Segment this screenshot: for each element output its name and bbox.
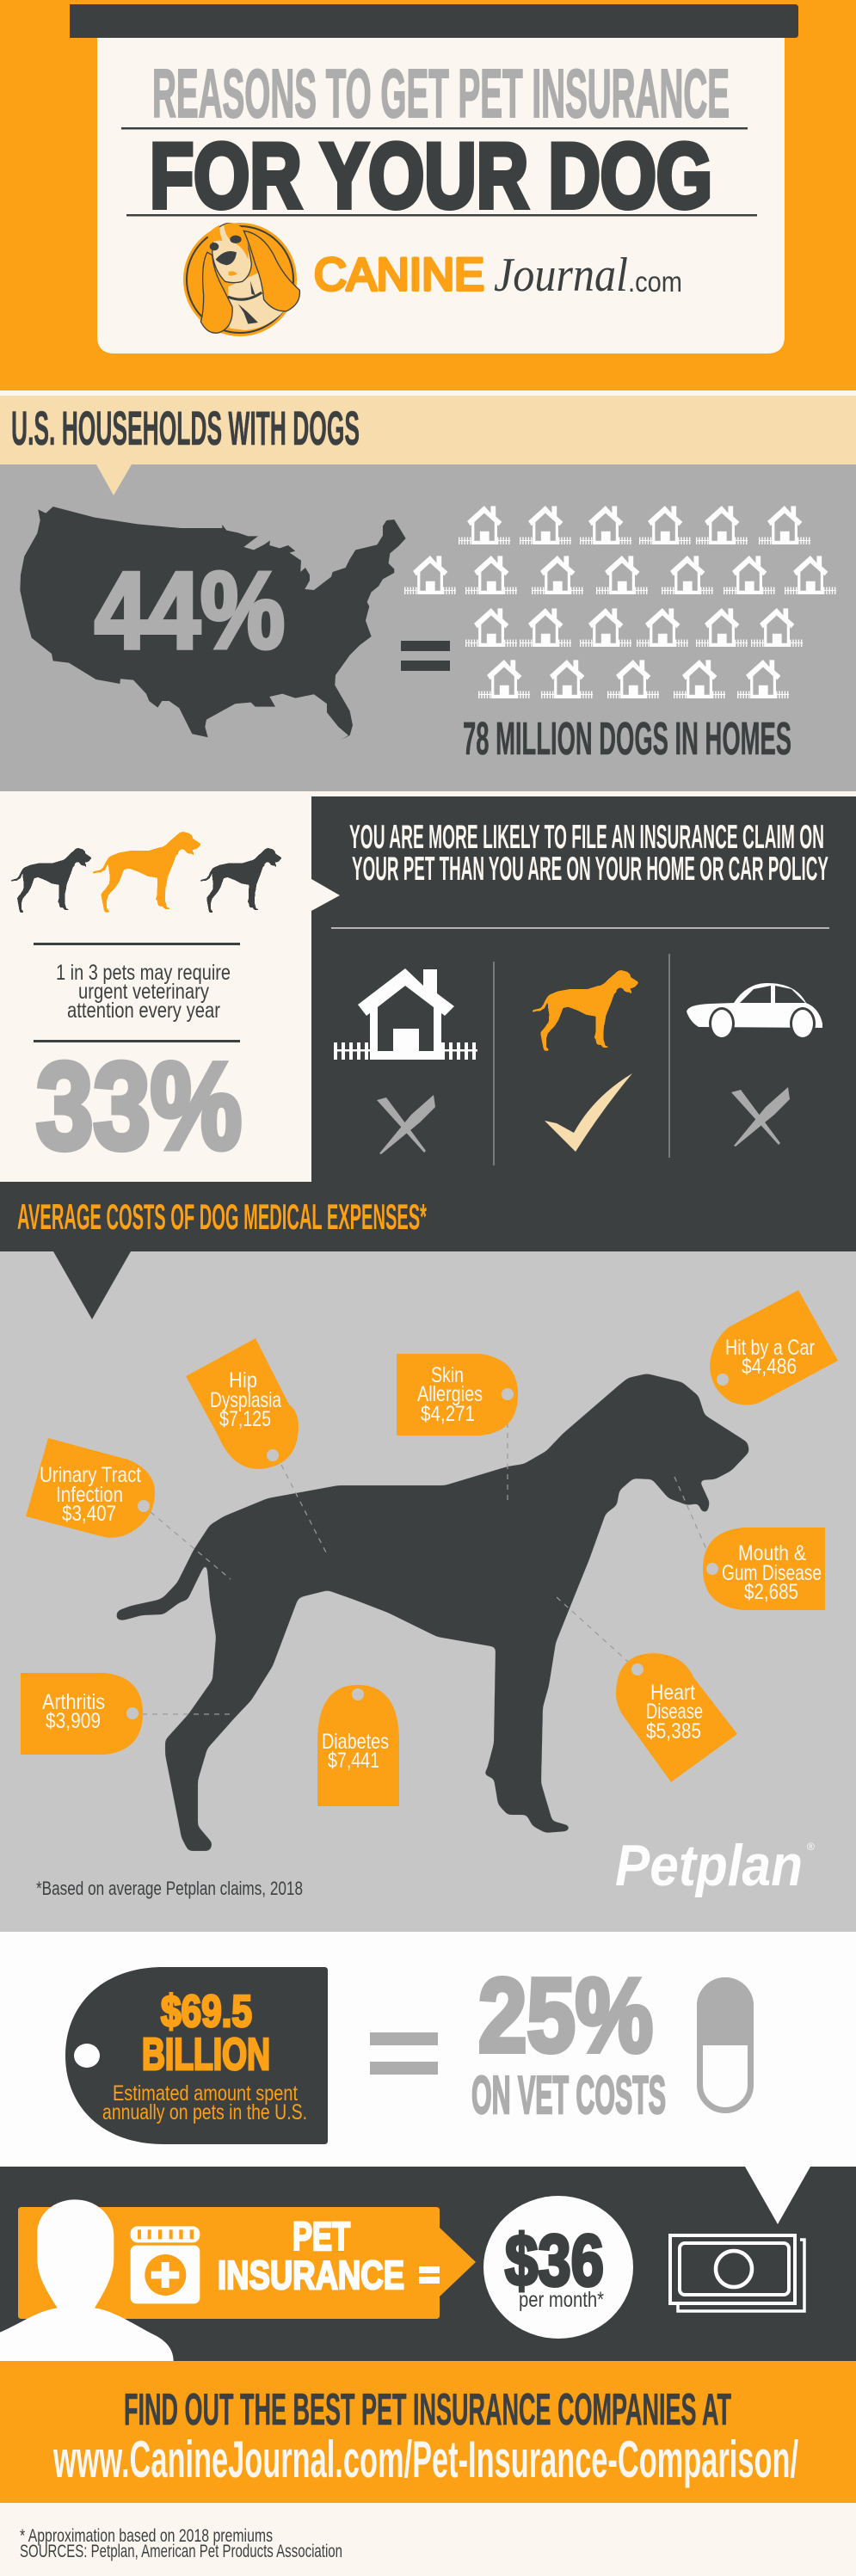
dark price tag: Estimated amount spent [113,2081,298,2106]
divider strip [0,390,856,396]
title line two: FOR YOUR DOG [150,124,712,227]
urgent care panel [0,796,340,1182]
registered mark: ® [807,1841,815,1853]
panel pointer [311,879,340,911]
medical costs panel [0,1251,856,1932]
icon: money stack [670,2235,804,2311]
tag: arthritis: Arthritis [42,1690,105,1714]
icon: check for pet [545,1073,632,1152]
us map [20,507,406,740]
dark price tag [65,1967,328,2144]
tag: hip dysplasia: Hip [229,1368,257,1393]
tag: skin allergies: $4,271 [421,1402,475,1426]
dark price tag: $69.5 [161,1987,252,2037]
tag: mouth and gum disease: $2,685 [744,1580,798,1604]
footnote: * Approximation based on 2018 premiums [20,2526,273,2546]
tag: urinary tract infection [26,1438,155,1538]
tag: hit by a car: $4,486 [742,1355,797,1379]
tag: mouth and gum disease [703,1528,825,1610]
dark price tag: annually on pets in the U.S. [102,2100,307,2124]
tag: arthritis [21,1673,143,1755]
tag: hit by a car: Hit by a Car [725,1336,815,1360]
tag: urinary tract infection: $3,407 [62,1502,116,1526]
header panel [0,0,856,390]
spending panel [0,1932,856,2167]
text: AVERAGE COSTS OF DOG MEDICAL EXPENSES* [17,1196,427,1237]
logo: dog in circle [183,223,299,336]
heading pointer [53,1251,131,1319]
tag: mouth and gum disease: Gum Disease [722,1561,822,1585]
petplan logo: Petplan [615,1833,803,1898]
equals sign [370,2032,438,2075]
dark band under panel [0,1182,311,1251]
dog icons [11,832,281,913]
icon: orange dog [533,970,638,1051]
tag: hit by a car [710,1290,838,1405]
sources: SOURCES: Petplan, American Pet Products Association [20,2542,342,2561]
tag: heart disease: Disease [646,1700,703,1724]
price circle: $36 [505,2220,604,2301]
households panel [0,396,856,791]
44 percent: 44% [95,550,285,671]
claims panel: dark side [311,796,856,1251]
pet insurance label: PET [293,2214,350,2259]
tag: arthritis: $3,909 [46,1709,101,1733]
icon: car [687,983,822,1040]
households panel: U.S. HOUSEHOLDS WITH DOGS [11,401,360,455]
tag: hip dysplasia: Dysplasia [210,1388,281,1412]
tag: hip dysplasia: $7,125 [219,1407,271,1431]
tag: hip dysplasia [186,1338,299,1469]
rule one [121,127,748,129]
urgent care text line three: attention every year [67,999,220,1023]
tag: skin allergies: Allergies [417,1382,483,1406]
households heading band [0,396,856,464]
source note: *Based on average Petplan claims, 2018 [36,1878,303,1899]
tag: heart disease: Heart [650,1681,695,1705]
dark price tag: BILLION [142,2030,270,2080]
pet insurance label line two: INSURANCE [218,2253,404,2297]
price circle: per month* [519,2288,604,2312]
orange arrow banner [18,2207,476,2319]
tag: skin allergies [397,1354,518,1436]
logo wordmark: dot com: .com [628,266,682,298]
divider strip [0,791,856,796]
tag: diabetes: $7,441 [328,1749,379,1773]
rule two [126,214,757,217]
equals sign [419,2266,440,2284]
icon: cross for home [377,1095,435,1154]
urgent care text: 1 in 3 pets may require [56,961,231,985]
tag: urinary tract infection: Urinary Tract [40,1463,141,1487]
tag: urinary tract infection: Infection [56,1483,123,1507]
house icons [404,506,836,698]
insurance cost panel [0,2167,856,2361]
tag: mouth and gum disease: Mouth & [738,1541,806,1565]
big dog silhouette [116,1374,749,1851]
call to action panel [0,2361,856,2503]
icon: pill [697,1977,754,2111]
icon: house [334,968,477,1060]
icon: medicine bottle [131,2226,200,2303]
top bar of card [70,4,798,38]
tag: heart disease: $5,385 [646,1719,701,1743]
25 percent: 25% [478,1957,653,2074]
tag: heart disease [616,1653,737,1782]
urgent care text line two: urgent veterinary [78,980,209,1004]
logo wordmark: canine: CANINE [314,249,484,300]
tag: diabetes [317,1685,399,1806]
price circle [483,2196,633,2339]
footer panel [0,2503,856,2576]
white pointer [745,2167,810,2224]
person silhouette [0,2199,174,2361]
tag: skin allergies: Skin [431,1363,464,1387]
title card [97,38,785,354]
33 percent: 33% [36,1038,242,1175]
equals sign [401,641,450,671]
icon: cross for car [731,1087,790,1147]
tag: diabetes: Diabetes [322,1730,389,1754]
logo wordmark: journal: Journal [494,249,628,302]
heading pointer [96,464,132,495]
